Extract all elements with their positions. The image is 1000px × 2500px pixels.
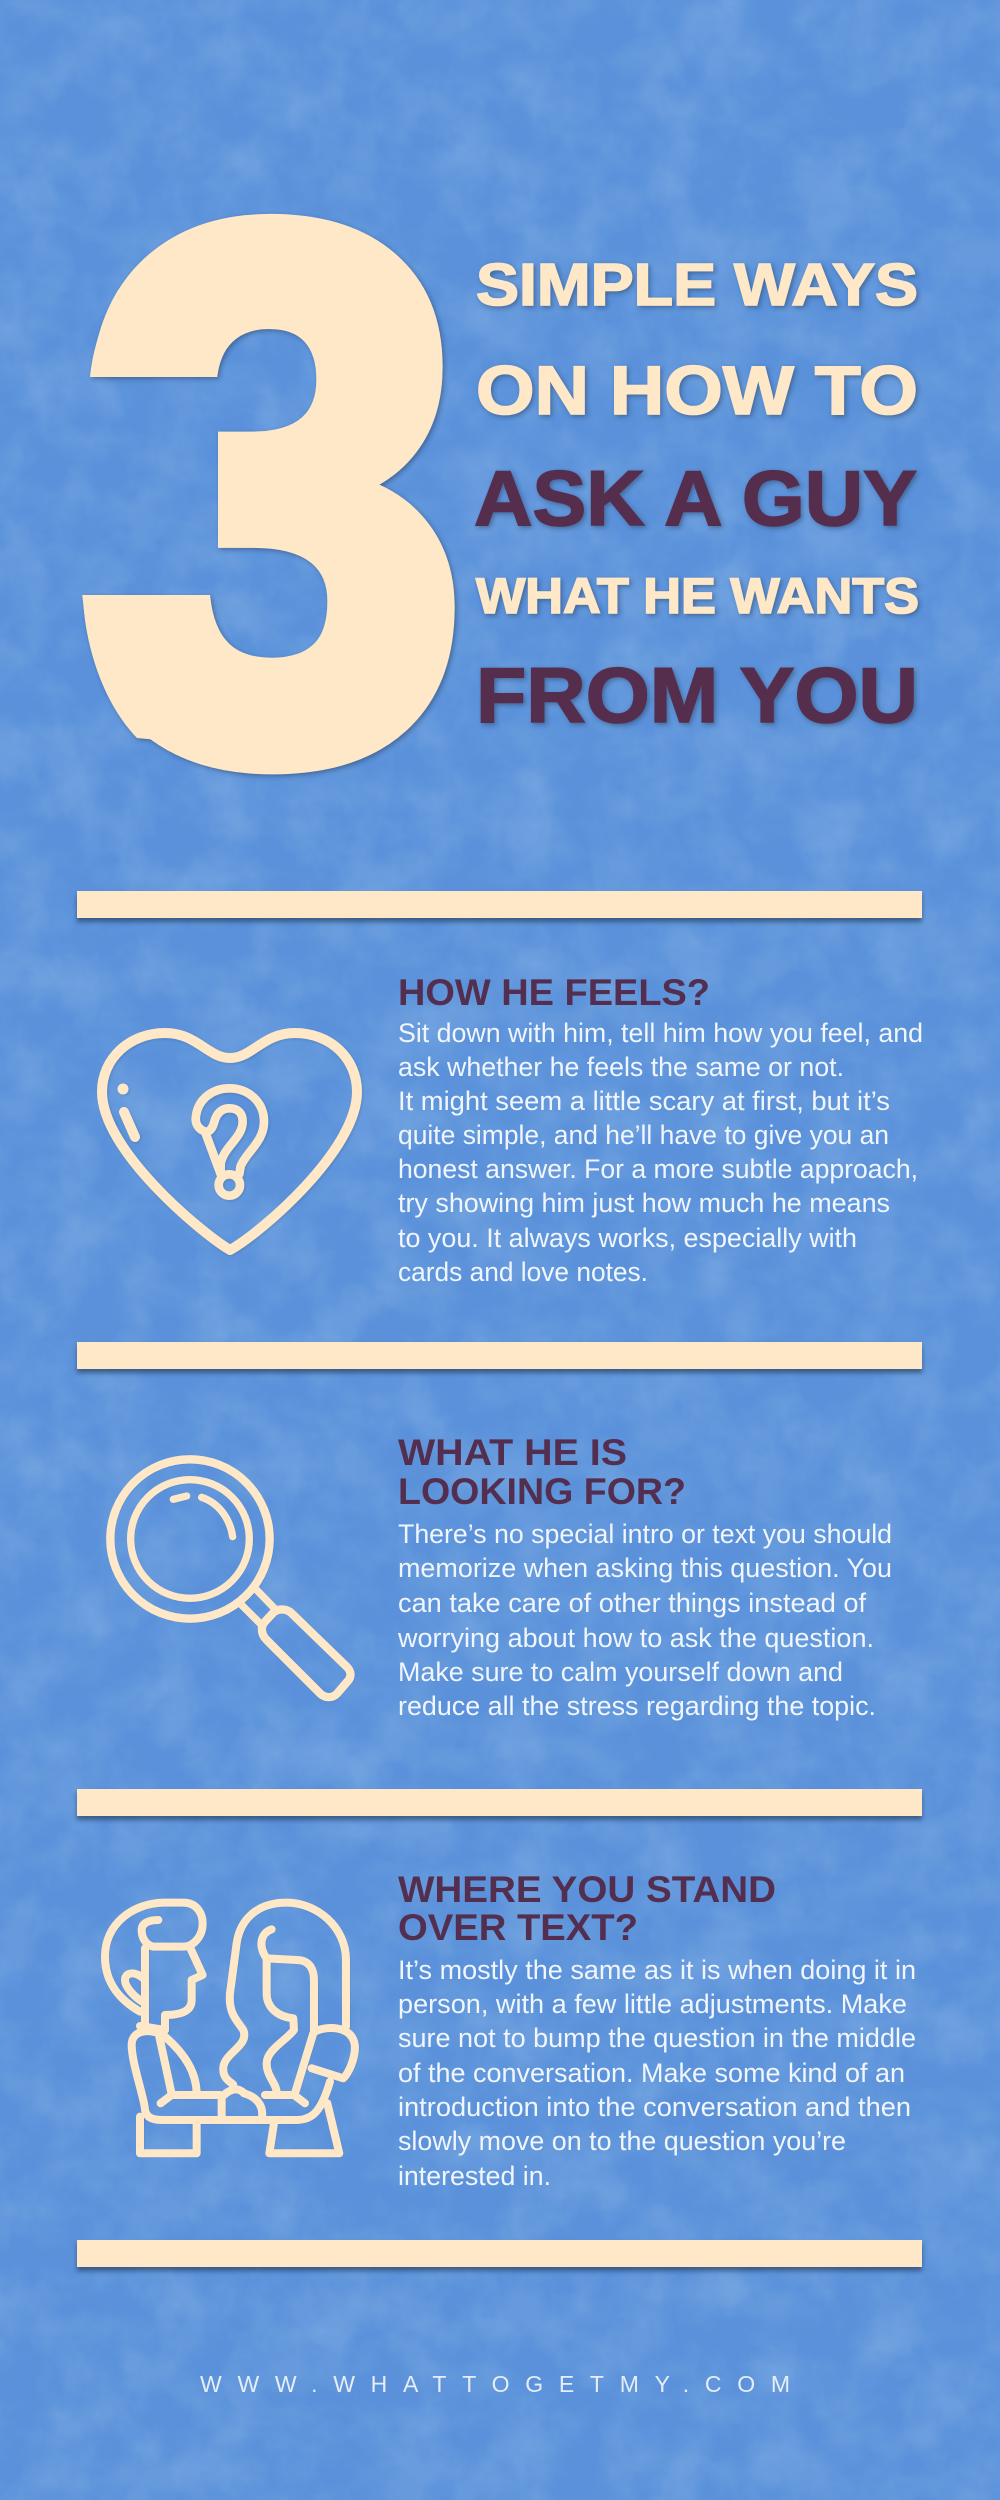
icon: couple holding a heart: [105, 1903, 355, 2153]
footer: website: WWW.WHATTOGETMY.COM: [200, 2371, 790, 2397]
panel: how he feels: [102, 972, 923, 1287]
icon: magnifying glass: [110, 1459, 350, 1697]
title line: on how to: ON HOW TO: [476, 352, 918, 429]
title line: simple ways: SIMPLE WAYS: [476, 252, 918, 318]
body text: Make sure to calm yourself down and: [398, 1657, 843, 1687]
heading: [398, 1869, 776, 1948]
body text: sure not to bump the question in the middle: [398, 2023, 916, 2053]
heading: WHERE YOU STAND: [398, 1869, 776, 1910]
body text: of the conversation. Make some kind of an: [398, 2058, 905, 2088]
body text: quite simple, and he’ll have to give you an: [398, 1120, 889, 1150]
body text: There’s no special intro or text you should: [398, 1519, 892, 1549]
body text: can take care of other things instead of: [398, 1588, 866, 1618]
panel: where you stand over text: [105, 1869, 916, 2191]
body text: person, with a few little adjustments. Make: [398, 1989, 907, 2019]
body text: interested in.: [398, 2161, 551, 2191]
heading: LOOKING FOR?: [398, 1471, 686, 1512]
title line: what he wants: WHAT HE WANTS: [476, 568, 919, 624]
big numeral 3: [82, 214, 459, 779]
body text: [398, 1955, 916, 2191]
title block: [82, 214, 922, 779]
body text: slowly move on to the question you’re: [398, 2126, 846, 2156]
body text: Sit down with him, tell him how you feel, and: [398, 1018, 923, 1048]
big numeral 3: 3: [84, 79, 464, 907]
panel: what he is looking for: [110, 1432, 892, 1721]
body text: introduction into the conversation and then: [398, 2092, 911, 2122]
body text: try showing him just how much he means: [398, 1188, 890, 1218]
title line: from you: FROM YOU: [476, 651, 918, 739]
body text: to you. It always works, especially with: [398, 1223, 857, 1253]
body text: cards and love notes.: [398, 1257, 648, 1287]
body text: reduce all the stress regarding the topic.: [398, 1691, 876, 1721]
body text: It might seem a little scary at first, but it’s: [398, 1086, 890, 1116]
heading: [398, 1432, 686, 1512]
body text: memorize when asking this question. You: [398, 1553, 892, 1583]
heading: WHAT HE IS: [398, 1432, 627, 1473]
body text: ask whether he feels the same or not.: [398, 1052, 844, 1082]
icon: heart with question mark: [102, 1033, 357, 1250]
body text: [397, 1519, 892, 1721]
body text: worrying about how to ask the question.: [397, 1623, 874, 1653]
heading: OVER TEXT?: [398, 1907, 638, 1948]
heading: HOW HE FEELS?: [398, 972, 710, 1013]
body text: honest answer. For a more subtle approach,: [398, 1154, 918, 1184]
body text: [398, 1018, 923, 1287]
title line: ask a guy: ASK A GUY: [474, 454, 917, 542]
body text: It’s mostly the same as it is when doing it in: [398, 1955, 916, 1985]
